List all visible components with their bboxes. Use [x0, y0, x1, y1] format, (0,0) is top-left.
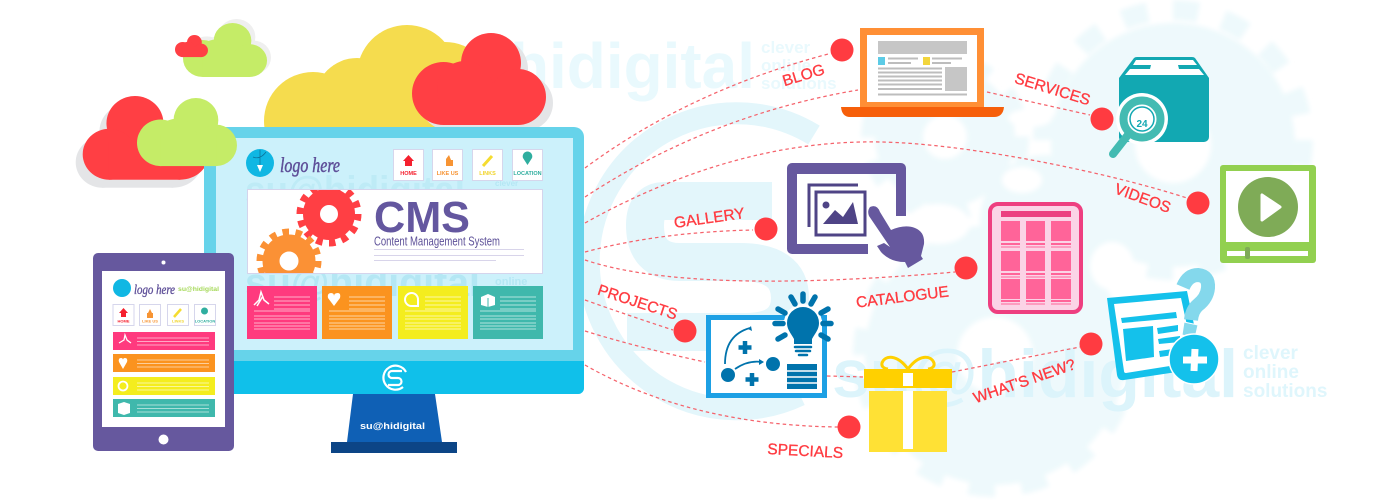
tablet bar: orange [113, 354, 215, 372]
watermark: top brand text: online [761, 56, 811, 75]
nav button: links: LINKS [479, 171, 496, 177]
screen [216, 138, 573, 350]
label: blog: BLOG [781, 61, 827, 90]
tablet brand text: su@hidigital [178, 286, 219, 293]
monitor stand [347, 394, 442, 442]
dot: what's new [1080, 332, 1102, 356]
icon: box with magnifier (services): 24 [1136, 119, 1148, 130]
watermark: top brand text: solutions [761, 74, 837, 93]
icon: laptop (blog) [841, 28, 1004, 117]
watermark: bottom brand text: su@hidigital [832, 336, 1238, 412]
cloud: green left (over monitor) [137, 98, 237, 166]
watermark: bottom brand text: clever [1243, 343, 1299, 364]
tile: pink [247, 286, 317, 339]
nav button: location: LOCATION [513, 171, 542, 177]
gear: red [300, 185, 358, 243]
cloud: red left with shadow [76, 96, 210, 188]
question mark [1182, 275, 1208, 338]
label: what's new: WHAT'S NEW? [971, 356, 1078, 407]
tablet nav icons: LINKS [172, 318, 184, 324]
tablet nav icons: HOME [118, 318, 130, 324]
monitor: su@hidigital [245, 261, 480, 305]
icon: catalogue grid [990, 204, 1081, 312]
gear: orange [256, 228, 322, 273]
icon: gallery tablet with hand [787, 163, 924, 268]
tile: orange [322, 286, 392, 339]
label: videos: VIDEOS [1112, 181, 1173, 217]
nav button: likes: LIKE US [437, 171, 459, 177]
icon: gift box [864, 357, 952, 452]
cloud: green top with small red [175, 19, 271, 77]
icon: box with magnifier (services) [1113, 57, 1209, 154]
screen watermark text: su@hidigital [245, 169, 465, 213]
label: specials: SPECIALS [767, 441, 844, 462]
tablet nav icons: LOCATION [195, 318, 215, 324]
logo text: logo here [280, 153, 340, 177]
monitor [204, 127, 584, 453]
dot: gallery [754, 218, 778, 240]
nav button: home [394, 150, 424, 180]
nav button: location [512, 150, 542, 180]
tablet bar: pink [113, 332, 215, 350]
cloud: yellow large [264, 25, 493, 170]
stand base [331, 442, 457, 453]
dot: services [1090, 108, 1114, 130]
cloud: red large with shadow [412, 33, 553, 131]
dot: blog [830, 38, 854, 62]
dot: projects [674, 320, 696, 342]
tablet nav icons: LIKE US [142, 318, 158, 324]
CMS subtitle: Content Management System [374, 234, 500, 248]
tablet [93, 253, 234, 451]
stand brand text: su@hidigital [360, 421, 425, 431]
tablet logo text: logo here [134, 283, 175, 298]
dot: catalogue [954, 256, 978, 280]
icon: newspaper with question mark and plus [1107, 275, 1219, 384]
CMS banner [247, 189, 543, 274]
watermark: top brand text: clever [761, 38, 811, 57]
tablet bar: yellow [113, 377, 215, 395]
tile: yellow [398, 286, 468, 339]
tablet logo [113, 279, 131, 297]
monitor frame [204, 127, 584, 394]
CMS heading: CMS [374, 193, 470, 242]
dashed connector lines [585, 53, 1187, 427]
label: services: SERVICES [1012, 70, 1092, 109]
tablet bar: teal [113, 399, 215, 417]
chin S logo [383, 366, 406, 390]
background watermark: gears [863, 10, 1303, 487]
watermark: top brand text: su@hidigital [373, 30, 755, 102]
label: projects: PROJECTS [595, 282, 679, 324]
label: catalogue: CATALOGUE [855, 283, 950, 312]
icon: project board with light bulb [708, 294, 831, 396]
icon: video player [1220, 165, 1316, 263]
tile: teal [473, 286, 543, 339]
watermark: bottom brand text: solutions [1243, 381, 1327, 402]
monitor: clever [495, 179, 518, 188]
watermark: bottom brand text: online [1243, 362, 1299, 383]
nav button: home: HOME [400, 171, 417, 177]
logo mark [246, 149, 274, 177]
nav button: links [472, 150, 502, 180]
monitor chin [204, 361, 584, 394]
tablet nav icons [118, 308, 215, 324]
monitor: online [495, 276, 527, 288]
dot: videos [1186, 192, 1210, 214]
label: gallery: GALLERY [673, 205, 746, 232]
dot: specials [838, 416, 860, 438]
background watermark: big S logo [589, 113, 814, 409]
tablet nav buttons [113, 304, 216, 326]
nav button: likes [432, 150, 462, 180]
